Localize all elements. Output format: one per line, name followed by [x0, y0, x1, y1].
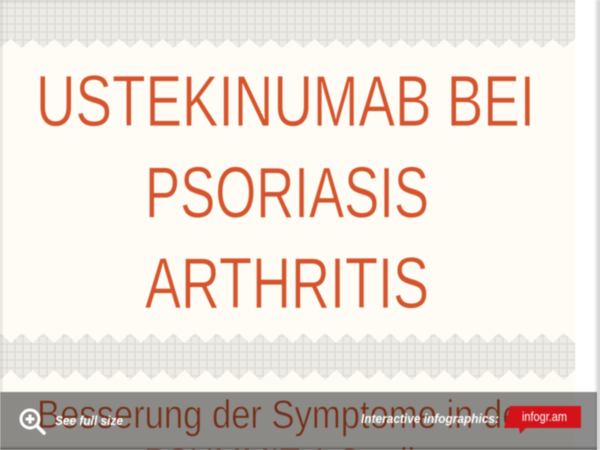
infogr.am badge [504, 406, 581, 434]
bottom hexagon band [0, 333, 575, 380]
title line 2: PSORIASIS [145, 154, 429, 234]
see full size label: See full size [55, 413, 123, 428]
interactive infographics label: Interactive infographics: [361, 411, 499, 426]
title line 3: ARTHRITIS [145, 244, 429, 324]
title [36, 62, 535, 324]
subtitle line 1: Besserung der Symptome in der [37, 393, 533, 437]
infogr.am badge: infogr.am [522, 409, 567, 424]
top zigzag band [0, 0, 575, 48]
viewer toolbar [0, 392, 597, 450]
subtitle [37, 393, 533, 450]
icon: magnifier zoom [21, 410, 44, 433]
toolbar background [0, 392, 597, 450]
